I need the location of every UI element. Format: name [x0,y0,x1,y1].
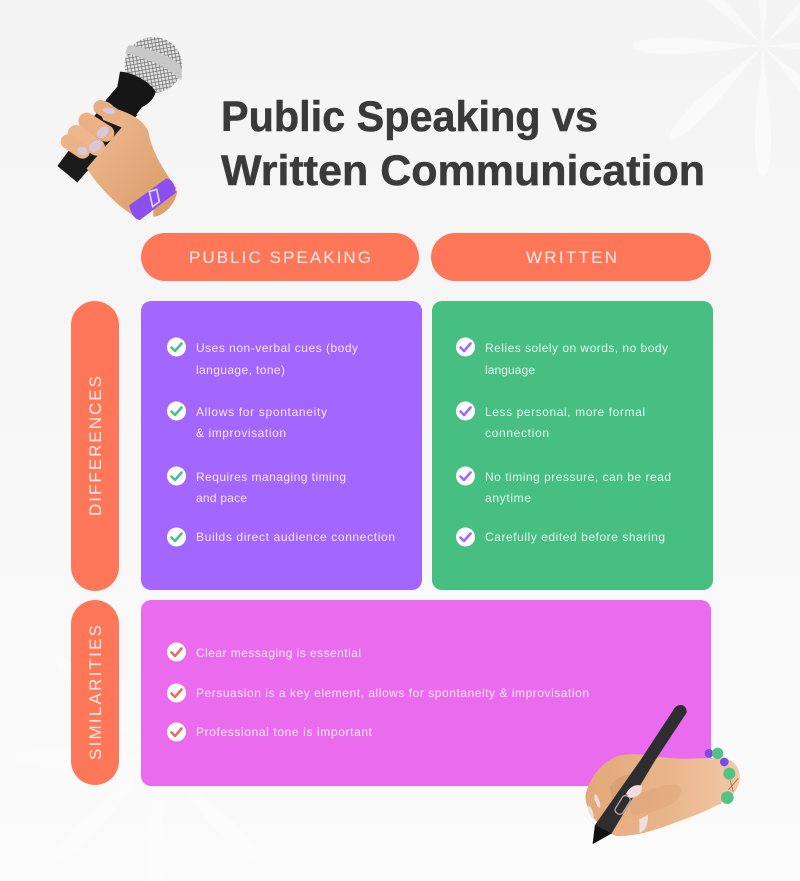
item: non-verbal cues [167,338,358,377]
item: professional tone [167,722,373,742]
icon: hand writing with pen [585,705,740,844]
item: formal [456,402,645,440]
item: non-verbal cues: Uses non-verbal cues (body [196,341,358,355]
panel: written differences [432,301,713,590]
panel: public speaking differences [141,301,422,590]
item: words only [456,338,668,377]
item: words only: language [485,363,535,377]
header: written [431,233,711,281]
icon: hand holding microphone [57,37,182,220]
item: persuasion: Persuasion is a key element, allows for spontaneity & improvisation [196,686,589,700]
side label: similarities: SIMILARITIES [86,625,105,760]
item: persuasion [167,684,589,702]
item: timing: and pace [196,491,247,505]
item: spontaneity [167,402,327,440]
panel: similarities [141,600,711,786]
item: words only: Relies solely on words, no body [485,341,668,355]
item: non-verbal cues: language, tone) [196,363,285,377]
item: clear messaging: Clear messaging is essential [196,646,361,660]
item: formal: connection [485,426,549,440]
item: audience connection [167,528,395,546]
item: edited [456,528,665,546]
item: professional tone: Professional tone is important [196,725,373,739]
item: timing [167,466,346,505]
item: edited: Carefully edited before sharing [485,530,665,544]
title: Public Speaking vs [221,93,598,141]
item: clear messaging [167,642,361,662]
side label: differences [71,301,119,591]
side label: differences: DIFFERENCES [86,376,105,516]
item: spontaneity: Allows for spontaneity [196,405,327,419]
header: public speaking [141,233,419,281]
title [221,93,705,195]
header: written: WRITTEN [526,248,617,267]
item: no timing pressure: anytime [485,491,531,505]
item: formal: Less personal, more formal [485,405,645,419]
item: no timing pressure [456,466,671,505]
item: timing: Requires managing timing [196,470,346,484]
item: no timing pressure: No timing pressure, can be read [485,470,671,484]
decorative flower: top right [633,0,800,176]
side label: similarities [71,600,119,785]
decorative flower: bottom left [14,615,300,881]
header: public speaking: PUBLIC SPEAKING [189,248,371,267]
item: spontaneity: & improvisation [196,426,286,440]
title: Written Communication [221,147,705,195]
item: audience connection: Builds direct audience connection [196,530,395,544]
